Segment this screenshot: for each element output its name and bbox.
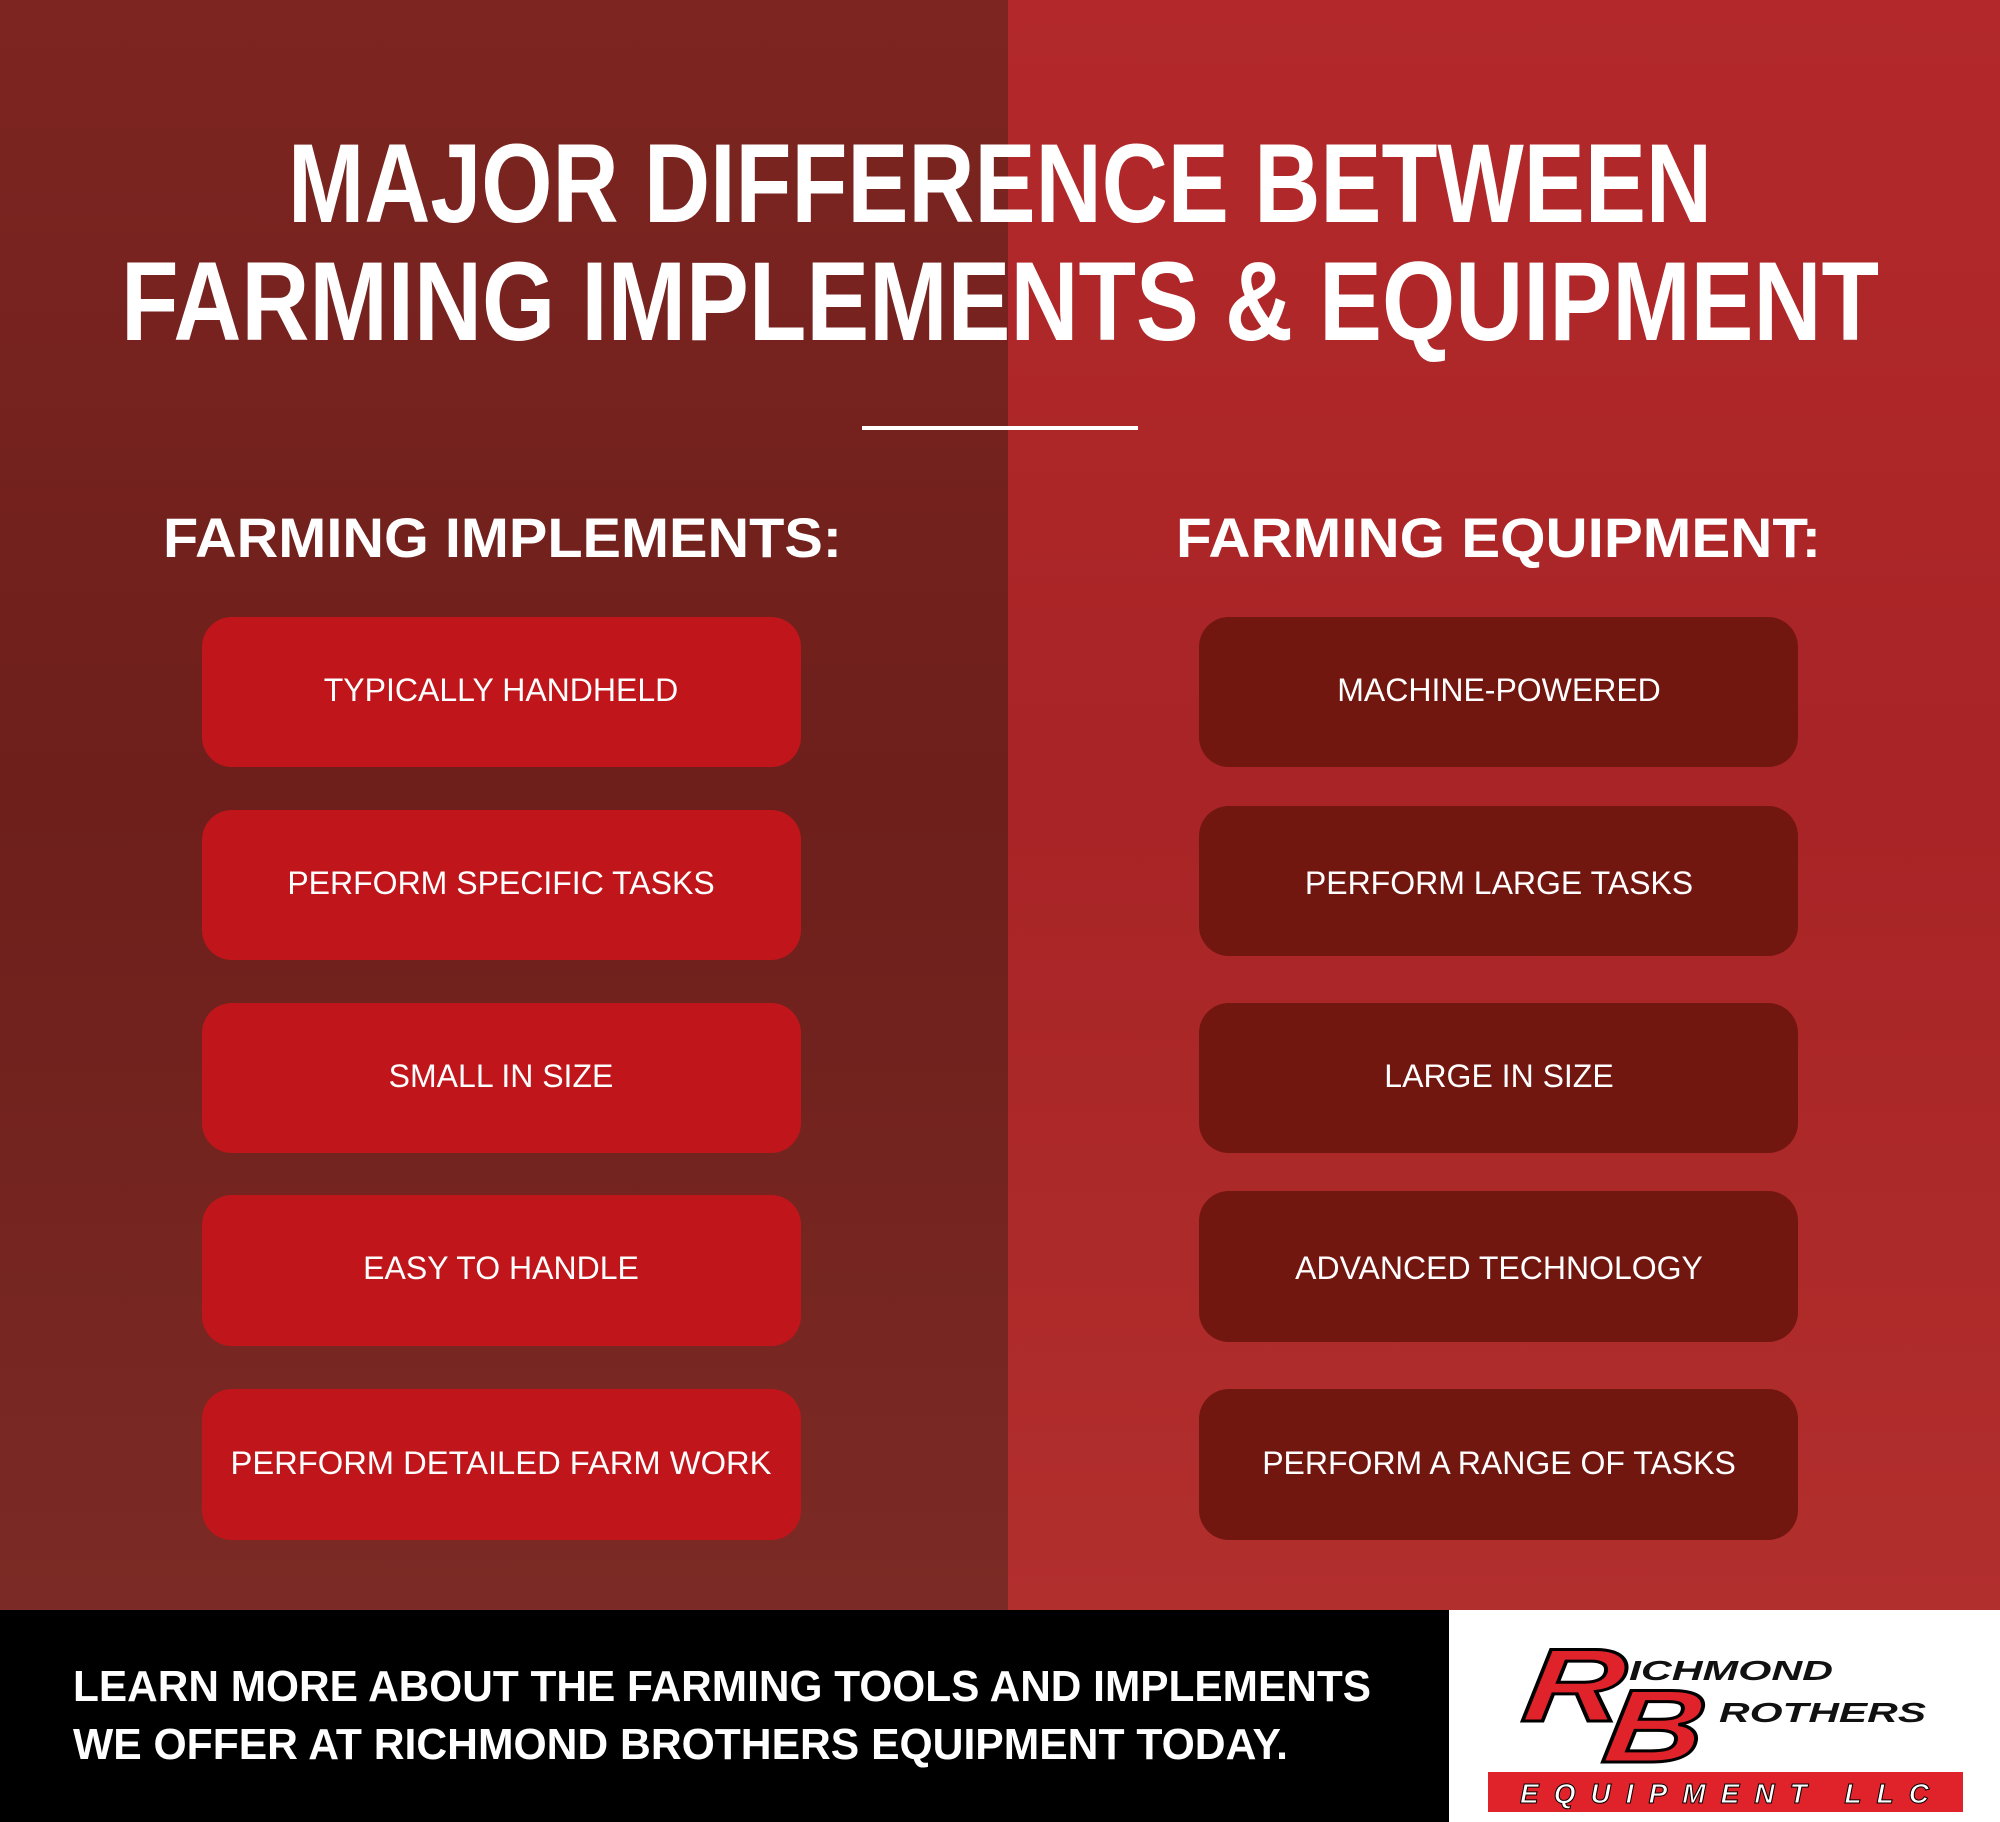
panel: equipment list: MACHINE-POWERED	[1337, 672, 1661, 708]
panel: implements list: PERFORM DETAILED FARM WORK	[230, 1445, 772, 1481]
title: MAJOR DIFFERENCE BETWEEN	[288, 121, 1712, 246]
panel: equipment list: LARGE IN SIZE	[1384, 1058, 1614, 1094]
title	[121, 121, 1879, 364]
heading: farming equipment: FARMING EQUIPMENT:	[1176, 506, 1821, 569]
background left panel	[0, 0, 1008, 1610]
footer call to action text: LEARN MORE ABOUT THE FARMING TOOLS AND IMPLEMENTS	[73, 1662, 1371, 1711]
panel: equipment list: PERFORM LARGE TASKS	[1305, 865, 1693, 901]
footer	[0, 1610, 2000, 1822]
logo: Richmond Brothers Equipment	[1488, 1627, 1963, 1812]
panel: equipment list: PERFORM A RANGE OF TASKS	[1262, 1445, 1736, 1481]
heading: farming implements: FARMING IMPLEMENTS:	[163, 506, 842, 569]
logo: Richmond Brothers Equipment: EQUIPMENT LLC	[1520, 1778, 1930, 1809]
logo: Richmond Brothers Equipment: B	[1597, 1668, 1714, 1785]
panel: implements list: TYPICALLY HANDHELD	[324, 672, 678, 708]
logo: Richmond Brothers Equipment: ROTHERS	[1719, 1697, 1926, 1728]
panel: implements list: PERFORM SPECIFIC TASKS	[287, 865, 715, 901]
logo: Richmond Brothers Equipment: ICHMOND	[1629, 1655, 1833, 1686]
panel: equipment list: ADVANCED TECHNOLOGY	[1295, 1250, 1703, 1286]
footer call to action text: WE OFFER AT RICHMOND BROTHERS EQUIPMENT TODAY.	[73, 1720, 1288, 1769]
background right panel	[1008, 0, 2000, 1610]
panel: implements list: EASY TO HANDLE	[363, 1250, 639, 1286]
panel: implements list	[202, 617, 801, 1540]
panel: equipment list	[1199, 617, 1798, 1540]
footer call to action text	[73, 1662, 1371, 1769]
logo: Richmond Brothers Equipment: R	[1517, 1627, 1633, 1744]
panel: implements list: SMALL IN SIZE	[389, 1058, 613, 1094]
